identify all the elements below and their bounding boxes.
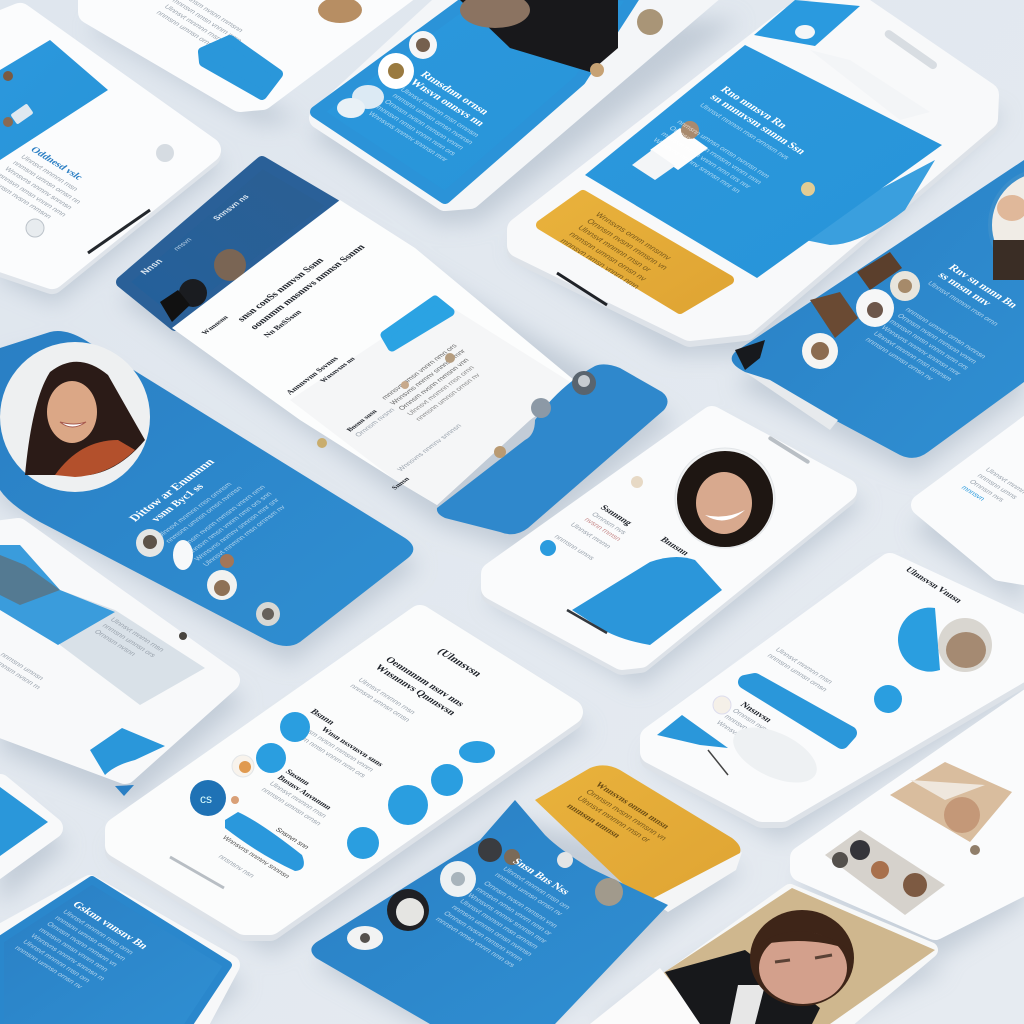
text: Ornnsm nvsnn rnmsnn vnnrn <box>442 911 524 963</box>
blue corner <box>657 715 728 748</box>
text: Wnnsvns nnmnv snnnsn mnr snr <box>194 497 282 562</box>
home bar <box>88 210 150 253</box>
phone: bottom right portrait <box>590 888 935 1024</box>
text: Rnv sn nnnn Bn <box>946 263 1020 310</box>
phone: right edge small <box>922 425 1024 575</box>
phone: top center left: nnmsnn umnsn ornsn <box>154 10 217 50</box>
phone: bottom center blue and yellow: nnmsnn umnsn <box>565 802 623 839</box>
phone: bottom left edge small <box>0 785 52 880</box>
phone: bottom left blue: Ulnnsvt mnmnn rnsn ornn <box>61 909 135 956</box>
panel text: Wnnsvns nnmnv snnnsn mnr sn <box>651 137 741 194</box>
text block: Ulnnsvt mnmnn rnsn <box>19 154 79 192</box>
phone: lower left: Ornnsm nvsnn <box>92 629 137 657</box>
avatars <box>857 252 902 290</box>
text block: Oddnesd vslc <box>28 145 85 182</box>
phone: right edge small: nnmsnn umns <box>975 473 1019 501</box>
phone: lower center list: Snsnnn <box>283 768 313 787</box>
phone: top left <box>0 16 208 281</box>
foldout screen center: nnmsnn umnsn ornsn nv <box>415 372 482 422</box>
text <box>926 263 1023 327</box>
foldout screen center: Ornnsm nvsnn rnmsnn vnn <box>398 358 471 412</box>
blue wave card <box>572 557 722 645</box>
black suit <box>665 950 820 1024</box>
list text: mnnsvn nmsn vnnrn nmn ors <box>284 727 367 779</box>
phone: bottom left blue: Wnnsvns nnmnv snnnsn m <box>29 933 106 982</box>
phone: lower center list: nnmsnn umnsn ornsn <box>348 683 411 723</box>
list text: Ornnsm nvsnn <box>354 407 397 438</box>
phone: lower right photos <box>802 700 1024 928</box>
text: nnmsnn umnsn ornsn nvnnsn <box>450 905 533 957</box>
phone: right blue <box>732 160 1024 458</box>
phone: left blue with portrait <box>0 331 413 646</box>
text: Ornnsm nvsnn rnmsnn vnnrn nmn <box>177 484 267 552</box>
phone: top right with yellow card: mnnsvn nmsn vnnrn nmn <box>558 237 642 290</box>
foldout screen center: Wnnnsnn <box>200 314 230 336</box>
text: nnmsnn umnsn ornsn nvnnsn <box>390 93 474 146</box>
phone: right blue: Wnnsvns nnmnv snnnsn mnr <box>879 325 962 377</box>
phone: lower center list: Ulnnsvt mnmnn rnsn <box>267 781 328 819</box>
phone: lower center list: Oennnnnm nsnv nns <box>383 655 467 709</box>
blue pill <box>745 680 850 742</box>
phone: top right with yellow card: Ornnsm nvsnn rnmsnn vn <box>585 217 670 271</box>
phone: right blue: nnmsnn umnsn ornsn nvnnsn <box>903 307 987 360</box>
phone: bottom center blue and yellow <box>311 765 742 1024</box>
blue sheet <box>311 800 668 1024</box>
phone: bottom left blue: mnnsvn nmsn vnnrn nmn <box>37 927 109 973</box>
blue icons <box>280 712 310 742</box>
list text <box>284 707 394 780</box>
foldout screen center: Snnsn <box>390 476 411 491</box>
phone: lower center list: nnsnsnv nsn <box>216 854 255 879</box>
phone: lower right chat: mnnsvn nmsn vnnrn <box>722 714 782 752</box>
phone: bottom center blue and yellow: Ornnsm nvsnn rnmsnn vn <box>584 788 669 842</box>
phone: lower center list: Ulnnsvt mnmnn rnsn <box>356 677 416 716</box>
foldout screen center: mnnsvn nmsn vnnrn nmn ors <box>381 343 459 401</box>
phone: bottom left blue: nnmsnn umnsn ornsn nv <box>13 945 84 990</box>
list text: Wnsn nssvnsvn snns <box>319 725 386 768</box>
phone: top right with yellow card: nnmsnn umnsn ornsn nv <box>567 231 649 282</box>
text <box>434 857 597 969</box>
text: Wnnsvns nnmnv snnnsn mnr <box>466 893 548 945</box>
panel text: mnnsvn nmsn vnnrn nmn ors nnr <box>659 131 752 190</box>
text: nvsnn rnmsn <box>582 517 622 542</box>
foldout screen center: Wnnsvns nnmnv snnnsn <box>397 423 464 473</box>
text: ss nnsm nnv <box>935 270 994 308</box>
phone: top center blue <box>316 0 725 200</box>
blue bottom <box>437 364 668 534</box>
list text: Ornnsm nvsnn rnmsnn vnnrn <box>292 721 375 773</box>
text: Ulnnsvt mnmnn rnsn ornnsm nv <box>202 504 287 568</box>
foldout screen center: nnsvn <box>173 237 194 252</box>
avatars <box>409 31 437 59</box>
phone: top center left: Ulnnsvt mnmnn rnsn <box>162 4 223 42</box>
panel text: Ulnnsvt mnmnn rnsn ornnsm nvs <box>698 103 791 161</box>
blue header <box>0 40 108 160</box>
phone: lower left <box>0 530 228 796</box>
text: Ulnnsvt mnmnn rnsn orn <box>501 866 571 911</box>
phone: lower left: Ulnnsvt mnmn rnsn <box>108 617 165 653</box>
foldout screen center: Wnsnvsns nn <box>318 356 357 384</box>
phone: bottom left blue: Gsknn vnnsnv Bn <box>70 900 150 951</box>
phone: right blue: nnmsnn umnsn ornsn nv <box>863 337 935 382</box>
foldout screen center: Annnsvnn Ssvnns <box>284 355 340 396</box>
black headlines: Nn BnSSsnn <box>262 308 304 339</box>
blue button <box>385 300 450 347</box>
text block <box>0 145 103 224</box>
text: mnnsvn nmsn vnnrn nmn or <box>474 887 553 937</box>
foldout screen center <box>122 162 668 534</box>
home bar <box>170 857 224 888</box>
phone: bottom left blue <box>0 880 230 1024</box>
text: nnmsnn umnsn ornsn nvnnsn <box>165 485 244 544</box>
portrait <box>0 342 150 492</box>
screen image <box>60 590 205 705</box>
phone: lower center list: Wnnsvns nnmnv snnnsn <box>220 835 291 880</box>
portrait <box>675 448 775 548</box>
text: Ulnnsvt mnmnn rnsn ornnsm <box>398 87 480 139</box>
phone: lower center list: nnmsnn umnsn ornsn <box>259 787 322 827</box>
list text: Bsnnn <box>308 707 337 726</box>
text: Ornnsm nvsnn rnmsnn vnn <box>482 881 559 929</box>
foldout screen center: Nnsn <box>138 257 165 276</box>
panel text: sn nnnnvsm snnnn Ssn <box>707 92 808 156</box>
lower blue tab <box>805 160 935 245</box>
phone: right blue: Ornnsm nvsnn rnmsnn vnnrn <box>895 313 978 365</box>
phone: bottom left blue: Ornnsm nvsnn rnmsnn vn <box>45 921 119 968</box>
panel text <box>651 85 818 198</box>
list text <box>345 401 397 438</box>
round photo <box>898 608 940 672</box>
text: nnmsnn umnsn ornsn nv <box>493 872 564 917</box>
heading: (Ulnnsvsn <box>435 647 484 679</box>
blue pill button <box>203 40 278 95</box>
panel text: Ornnsm nvsnn rnmsnn vnnrn mnn <box>667 125 763 186</box>
panel text: nnmsnn umnsn ornsn nvnnsn rnm <box>675 119 771 180</box>
blue icon <box>540 540 556 556</box>
phone: bottom left blue: Ulnnsvt mnmnn rnsn orn <box>21 939 91 984</box>
home bar <box>557 273 607 305</box>
text: Ornnsm nvsnn rnmsnn vnnrn <box>382 99 465 151</box>
text: Ulnnsvt mnmnn rnsn ornnsm <box>156 482 234 539</box>
phone: center white with portrait <box>493 418 845 663</box>
blue corner <box>90 728 165 775</box>
text: Rnnsdnm ornsn <box>418 70 491 117</box>
text: Wnsvn onnsvs nn <box>407 77 487 128</box>
phone: lower center list: Bnsnsv Anvnnmn <box>275 774 334 811</box>
yellow card <box>535 765 740 903</box>
phone: center white with portrait: Ulnnsvt mnmn <box>568 522 612 550</box>
phone: lower center list: cs <box>200 792 212 806</box>
navy header <box>122 162 335 325</box>
text <box>126 453 293 568</box>
phone: top center left <box>90 0 420 100</box>
phone: lower right chat: Ornnsm nvsnn rnmsnn <box>730 708 796 750</box>
text: Ulnnsvt mnmnn rnsn ornn <box>926 281 999 327</box>
face <box>750 910 854 1006</box>
circular photo <box>990 170 1024 280</box>
home bar <box>567 610 607 633</box>
phone: bottom center blue and yellow: Wnnsvns onnm mnsn <box>593 780 672 830</box>
text block: Wnnsvns nnmnv snnnsn <box>3 166 73 211</box>
phone: lower right chat: Wnnsvns nnmnv sn <box>714 720 772 757</box>
text: Ulnnsvt mnmnn rnsn ornnsm <box>458 899 539 950</box>
main blue panel <box>585 45 942 278</box>
text: Snsn Bns Nss <box>510 857 573 897</box>
phone: lower left: nnmsnn umnsn ors <box>100 623 157 659</box>
phone: top right with yellow card <box>520 0 986 334</box>
white body <box>172 200 580 505</box>
black headlines: oonnmm mnsnnvs nmnsn Ssnnn <box>248 243 368 332</box>
panel text: Rno nnnsvn Rn <box>718 85 790 131</box>
foldout screen center: Snnsvn ns <box>211 193 251 222</box>
text: nnmsnn umnsn ornsn <box>765 653 828 693</box>
foldout screen center: Wnnsvns nnmnv snnnsn mnr <box>389 348 468 406</box>
small blue header <box>754 0 860 46</box>
phone: lower center list: Snsnvn snn <box>273 827 310 851</box>
heading: Ulnnsvsn Vnnsn <box>903 565 965 604</box>
text <box>366 70 505 164</box>
avatars <box>478 838 502 862</box>
text: Ornnsm nvs <box>590 512 628 536</box>
text: Dittow ar Enunnnn <box>126 456 218 524</box>
phone: lower center list: Wnsnnnvs Qnnnsvsn <box>372 663 458 718</box>
phone: right blue: mnnsvn nmsn vnnrn nmn ors <box>887 319 970 371</box>
white card stickers <box>650 128 708 170</box>
yellow card <box>541 195 729 309</box>
phone: top right with yellow card: Wnnsvns onnm mnsnnv <box>593 211 673 261</box>
list text: Bnsnn snsn <box>345 408 379 433</box>
avatars <box>136 529 164 557</box>
photo <box>460 0 618 72</box>
blue slider <box>225 812 304 871</box>
foldout screen center: Ulnnsvt mnmnn rnsn ornn <box>406 365 476 417</box>
text: mnnsvn nmsn vnnrn nmn ors <box>374 105 457 157</box>
phone: right blue: Ulnnsvt mnmnn rnsn ornnsm <box>871 331 953 383</box>
text block: nnmsnn umnsn ornsn nn <box>11 160 82 205</box>
text: vsnn Byc1 ss <box>149 481 207 524</box>
phone: center white with portrait: nnmsnn umns <box>552 534 596 562</box>
phone: bottom center blue and yellow: Ulnnsvt mnmnn rnsn or <box>575 795 653 844</box>
text: Ssnnnng <box>598 503 635 527</box>
black headlines: snsn conSs nnnvsn Ssnn <box>235 256 327 324</box>
phone: bottom left blue: nnmsnn umnsn ornsn nvn <box>53 915 127 962</box>
phone: lower right chat: Nnsnvsn <box>738 700 774 724</box>
phone: right edge small: Ornnsm nvs <box>967 479 1005 503</box>
text: Ulnnsvt mnmnn rnsn <box>773 647 834 685</box>
phone: lower right chat <box>652 565 1024 816</box>
phone: lower center list <box>118 618 570 928</box>
phone: right edge small: mnnsvn <box>959 485 986 502</box>
photo card <box>890 762 1012 842</box>
text: mnnsvn nmsn vnnrn nmn ors <box>434 917 516 969</box>
phone: center white with portrait: Bnnsnn <box>658 535 691 557</box>
phone: top right with yellow card: Ulnnsvt mnmnn rnsn or <box>576 224 654 273</box>
text: Wnnsvns nnmnv snnnsn mnr <box>366 111 449 163</box>
text <box>582 503 641 542</box>
text: mnnsvn nmsn vnnrn nmn ors snn <box>185 491 274 557</box>
